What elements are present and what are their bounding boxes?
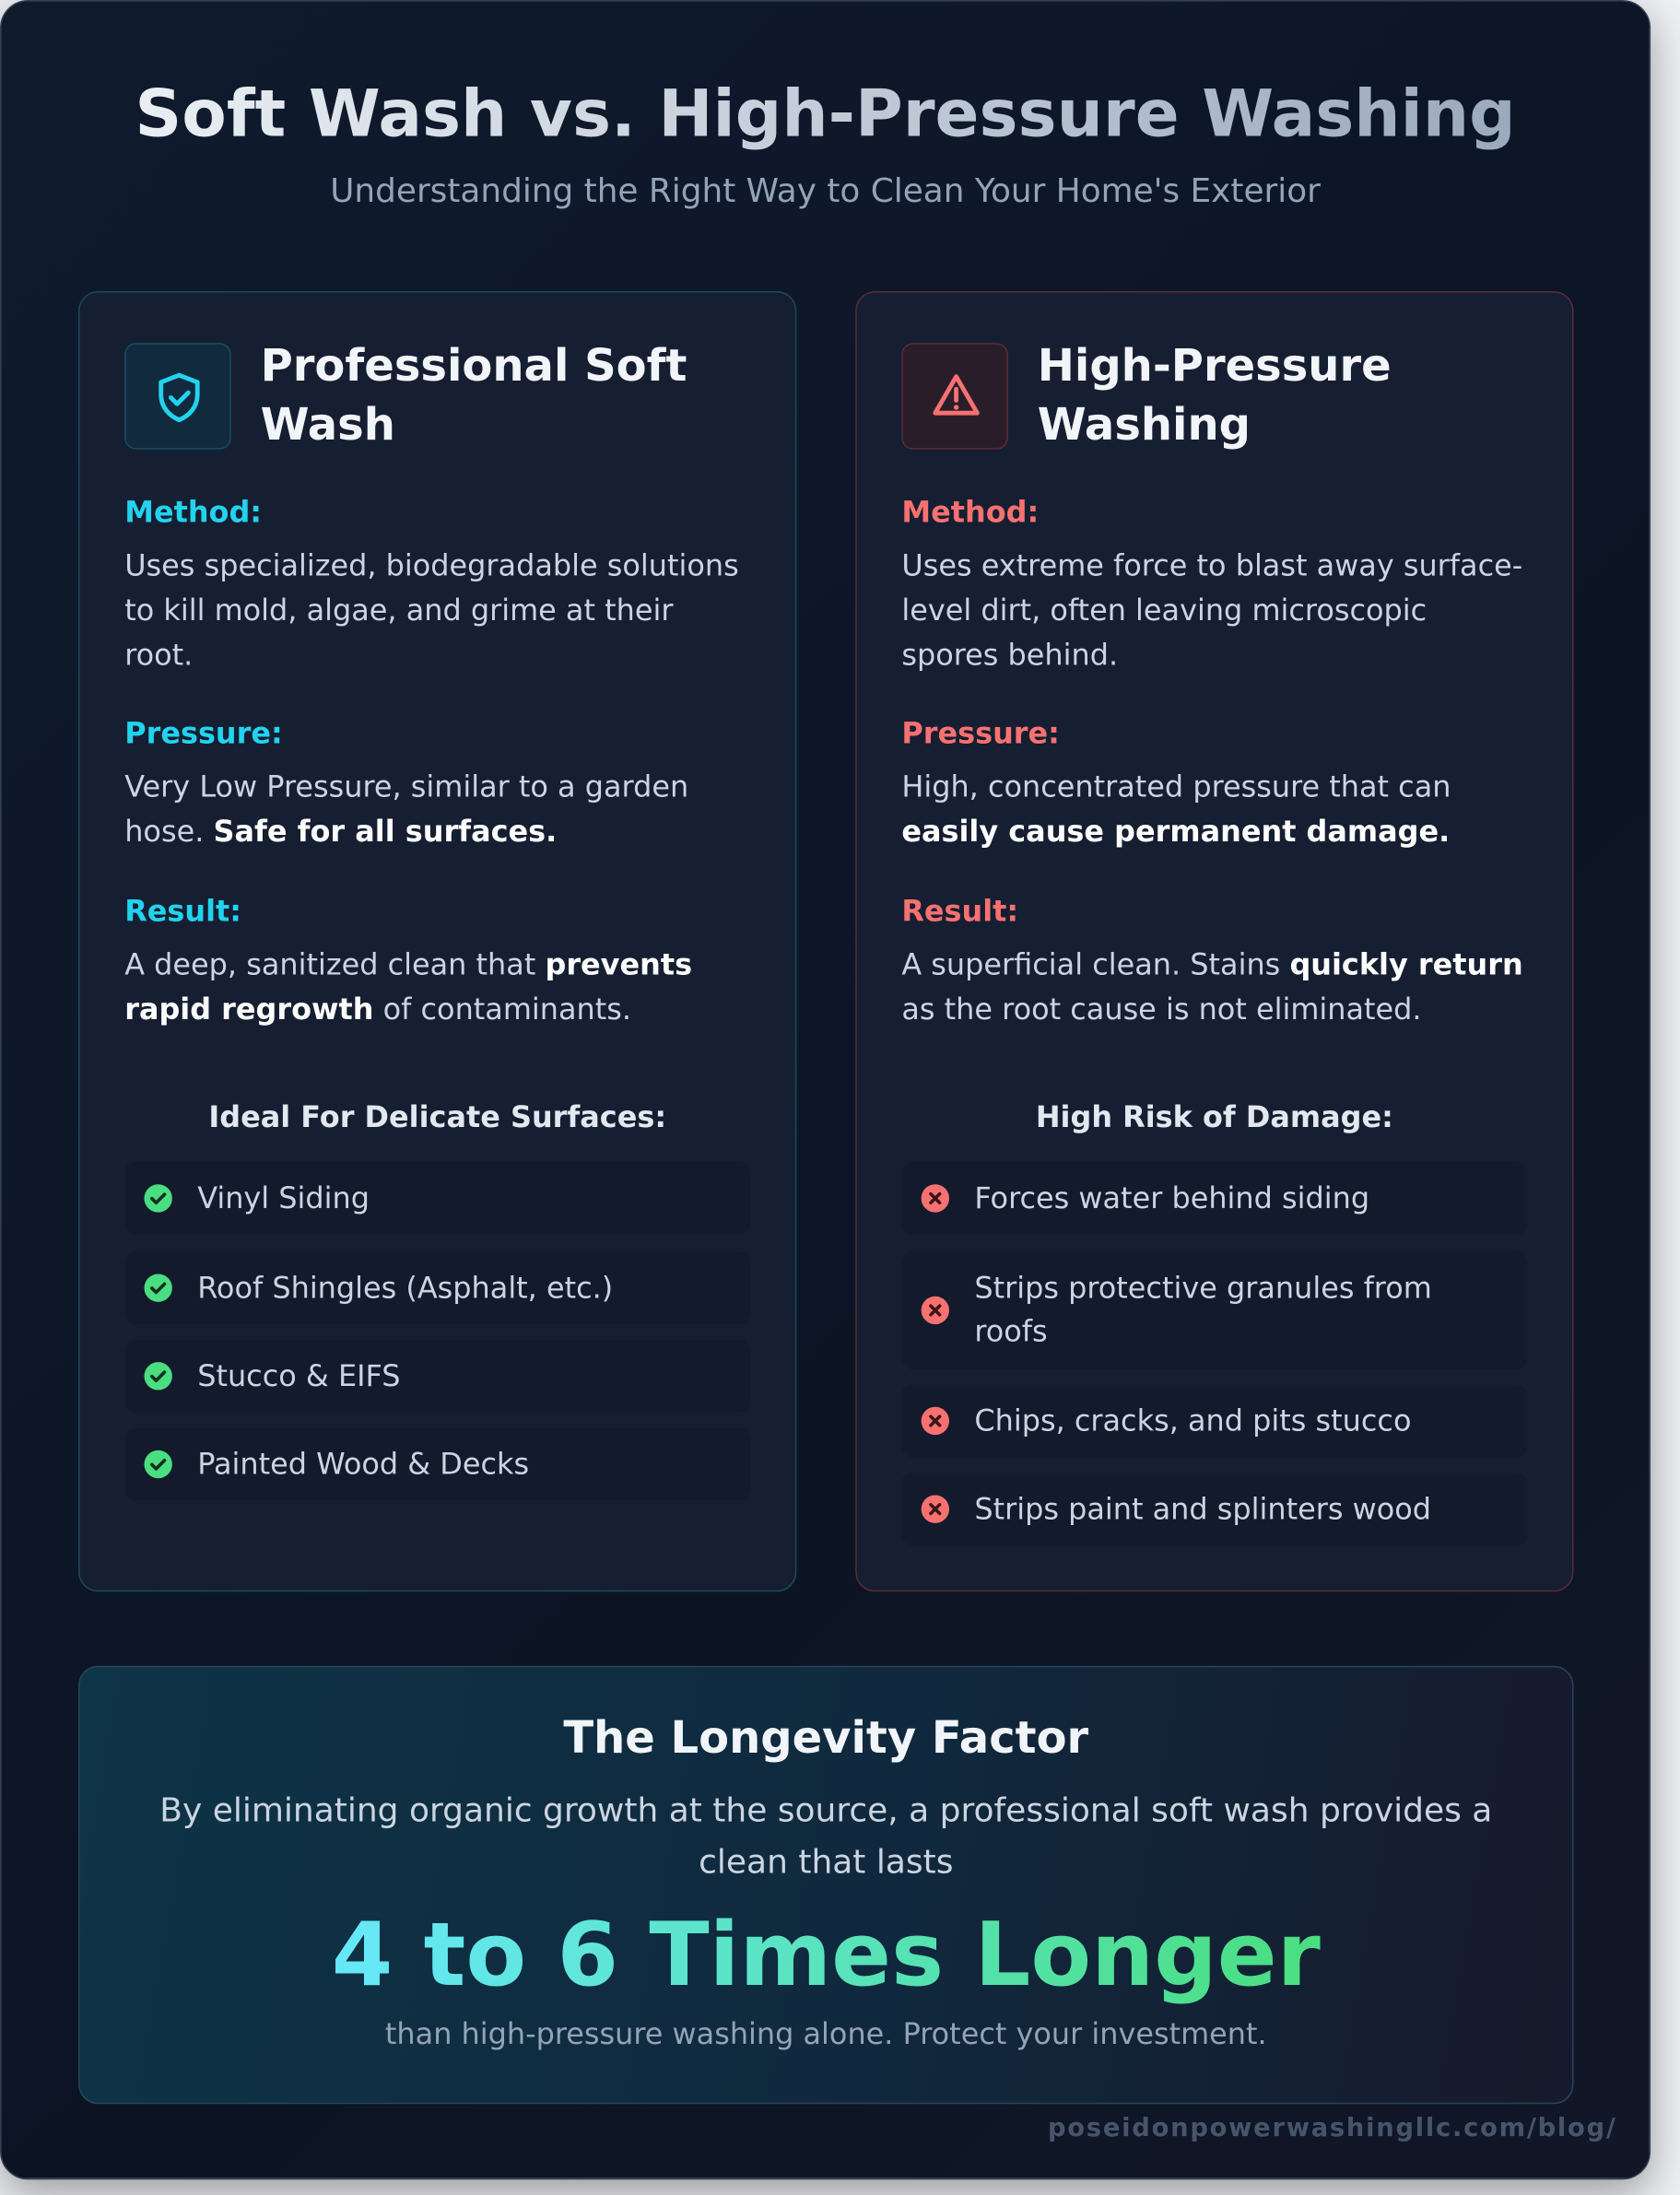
heading: High-Pressure <box>1038 342 1392 392</box>
panel: high pressure: Uses extreme force to blast away surface-level dirt, often leaving microscopic spores behind. <box>901 549 1522 672</box>
heading: Wash <box>261 400 395 451</box>
list heading: Ideal For Delicate Surfaces: <box>208 1100 666 1134</box>
list item <box>124 1340 750 1413</box>
panel: soft wash: Uses specialized, biodegradable solutions to kill mold, algae, and grime at their root. <box>124 549 739 672</box>
list item <box>124 1428 750 1501</box>
panel: soft wash: Very Low Pressure, similar to a garden hose. Safe for all surfaces. <box>124 770 688 849</box>
heading: Washing <box>1038 400 1251 451</box>
method: Method: <box>901 496 1039 529</box>
list item: Chips, cracks, and pits stucco <box>974 1403 1411 1437</box>
subtitle: Understanding the Right Way to Clean Your Home's Exterior <box>330 170 1321 210</box>
footer url: poseidonpowerwashingllc.com/blog/ <box>1048 2114 1617 2143</box>
list item: Vinyl Siding <box>197 1180 370 1215</box>
icon: warning triangle <box>901 343 1008 450</box>
list item: Strips paint and splinters wood <box>974 1492 1431 1525</box>
list item: Strips protective granules from <box>974 1271 1432 1305</box>
heading <box>261 342 687 451</box>
list item <box>901 1162 1527 1235</box>
list item <box>124 1251 750 1324</box>
heading <box>1038 342 1392 451</box>
list item: roofs <box>974 1314 1048 1348</box>
pressure: Pressure: <box>124 717 283 750</box>
list item: Painted Wood & Decks <box>197 1447 529 1481</box>
list heading: High Risk of Damage: <box>1036 1100 1393 1134</box>
footnote: than high-pressure washing alone. Protect your investment. <box>385 2017 1267 2051</box>
heading: Professional Soft <box>261 342 687 392</box>
list item <box>124 1162 750 1235</box>
panel: high pressure: A superficial clean. Stains quickly return as the root cause is not eliminated. <box>901 947 1523 1027</box>
heading: The Longevity Factor <box>563 1713 1088 1764</box>
list item <box>901 1384 1527 1457</box>
list item <box>901 1251 1527 1369</box>
list item: Stucco & EIFS <box>197 1358 401 1392</box>
big stat: 4 to 6 Times Longer <box>332 1904 1321 2006</box>
panel: soft wash: A deep, sanitized clean that prevents rapid regrowth of contaminants. <box>124 947 692 1027</box>
list item: Forces water behind siding <box>974 1180 1369 1215</box>
paragraph: By eliminating organic growth at the source, a professional soft wash provides a clean that lasts <box>159 1790 1492 1882</box>
panel: high pressure: High, concentrated pressure that can easily cause permanent damage. <box>901 770 1451 849</box>
list item: Roof Shingles (Asphalt, etc.) <box>197 1271 613 1304</box>
pressure: Pressure: <box>901 717 1060 750</box>
result: Result: <box>124 895 241 928</box>
panel: longevity factor <box>78 1666 1574 2104</box>
panel: soft wash <box>78 291 796 1591</box>
title: Soft Wash vs. High-Pressure Washing <box>135 76 1516 151</box>
result: Result: <box>901 895 1018 928</box>
panel: high pressure <box>855 291 1574 1591</box>
method: Method: <box>124 496 262 529</box>
icon: shield check <box>124 343 231 450</box>
list item <box>901 1473 1527 1545</box>
